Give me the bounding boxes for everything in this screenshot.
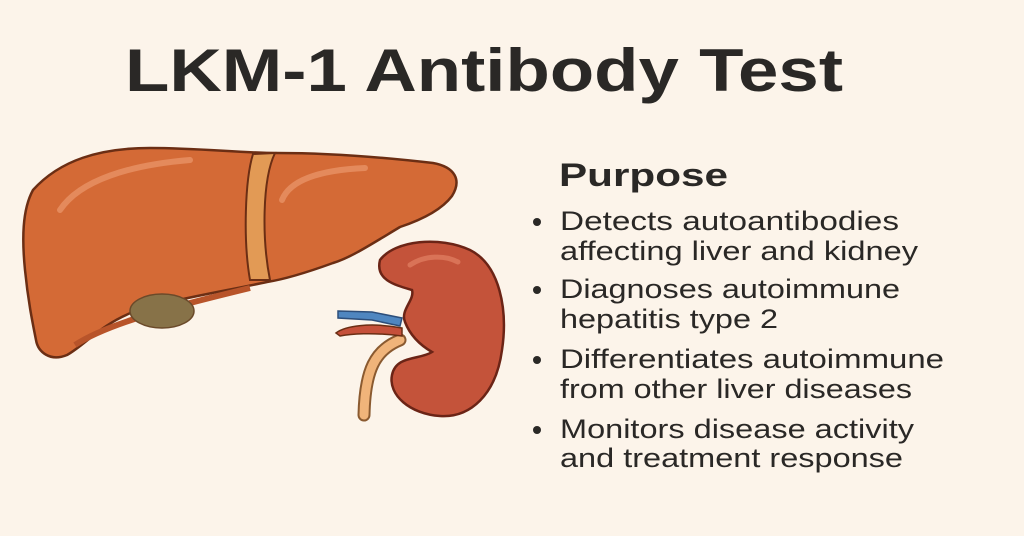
band — [246, 153, 275, 280]
panel: purpose — [533, 157, 944, 473]
bullet list: Differentiates autoimmune — [560, 344, 944, 374]
bullet list: Diagnoses autoimmune — [560, 274, 900, 304]
heading: purpose: Purpose — [559, 157, 728, 193]
bullet list: Monitors disease activity — [560, 414, 915, 444]
gallbladder — [130, 294, 194, 328]
bullet list — [533, 206, 944, 473]
icon: liver — [23, 148, 456, 357]
bullet list: Detects autoantibodies — [560, 206, 899, 236]
bullet list: and treatment response — [560, 443, 903, 473]
icon: kidney — [336, 242, 504, 416]
bullet list: affecting liver and kidney — [560, 236, 919, 266]
bullet list: from other liver diseases — [560, 374, 912, 404]
bullet list: hepatitis type 2 — [560, 304, 778, 334]
title: LKM-1 Antibody Test — [125, 37, 843, 104]
kidney body — [379, 242, 504, 416]
vessels — [338, 311, 402, 326]
ureter — [364, 340, 400, 415]
